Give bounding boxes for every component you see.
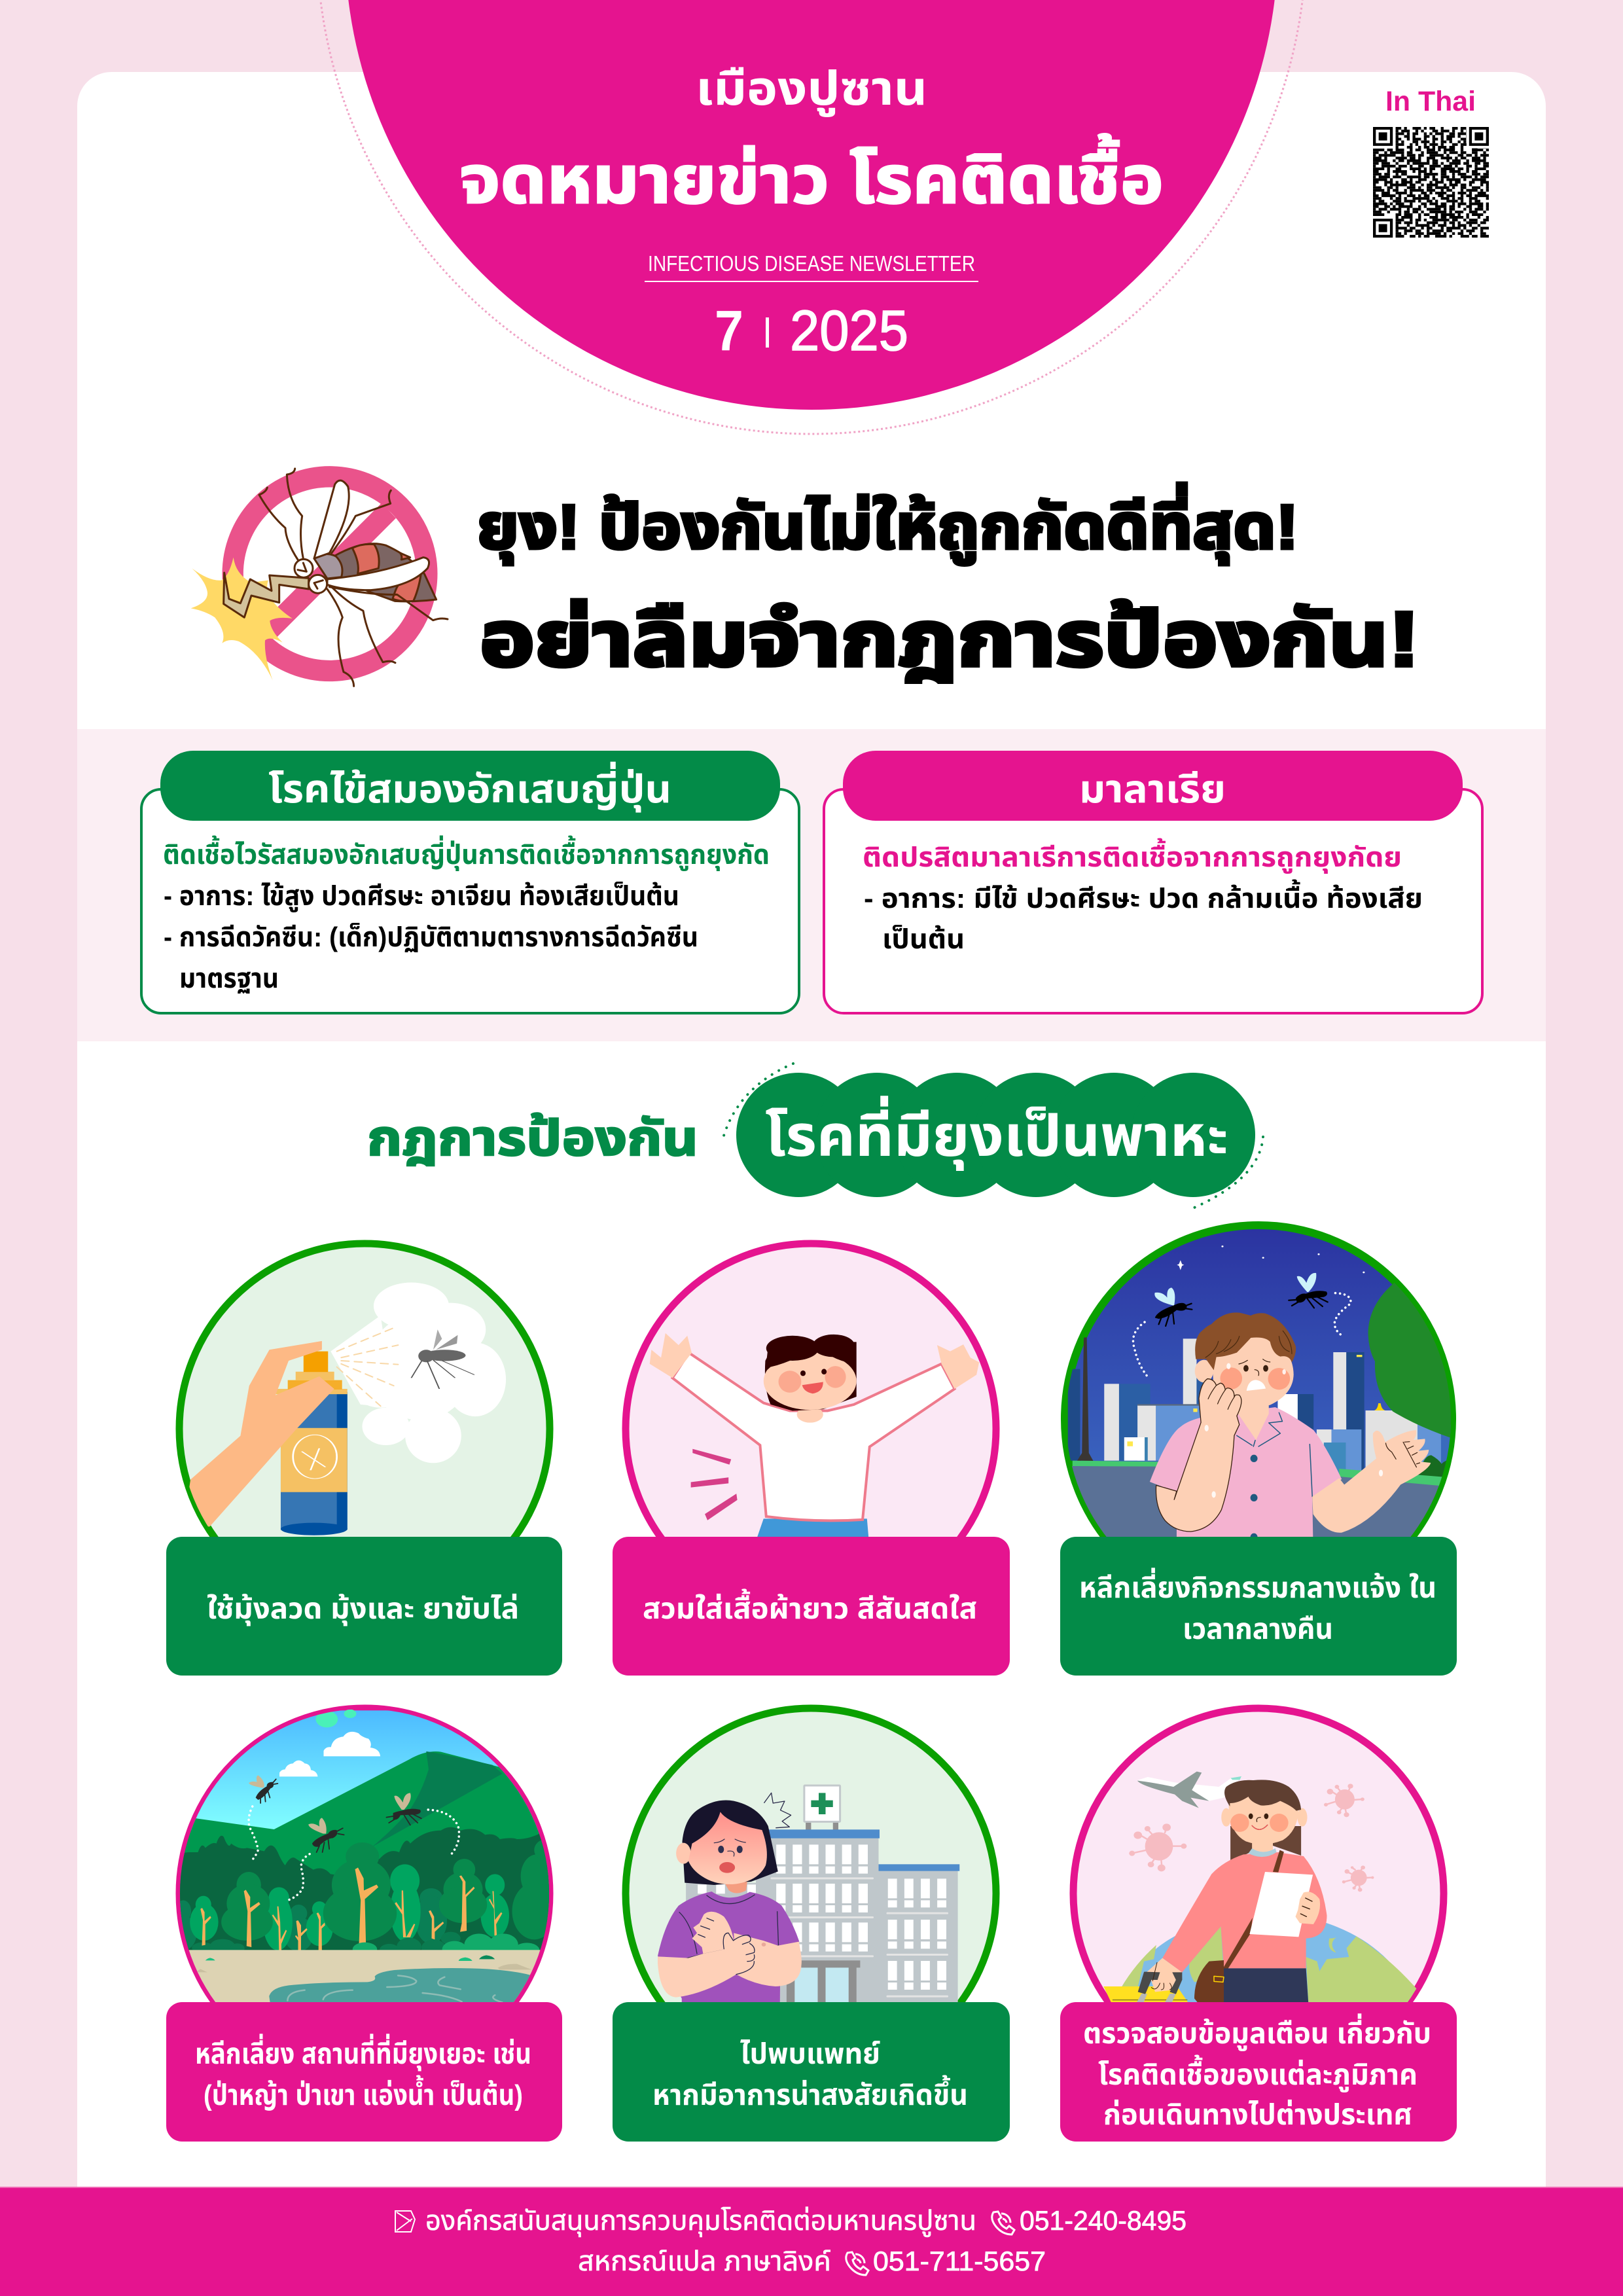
main headline line 1: ยุง! ป้องกันไม่ให้ถูกกัดดีที่สุด!	[477, 483, 1298, 565]
card label: สวมใส่เสื้อผ้ายาว สีสันสดใส	[643, 1588, 977, 1625]
main headline line 2: อย่าลืมจำกฎการป้องกัน!	[480, 596, 1419, 683]
issue date: 7	[715, 299, 743, 363]
card label	[166, 1537, 562, 1676]
footer organisation: องค์กรสนับสนุนการควบคุมโรคติดต่อมหานครปูซาน	[425, 2205, 976, 2237]
header badge	[317, 0, 1306, 434]
footer phone 1: 051-240-8495	[1020, 2205, 1186, 2236]
panel text: มาตรฐาน	[179, 963, 279, 994]
card label	[613, 2002, 1010, 2142]
panel: Japanese encephalitis	[141, 751, 799, 1013]
card label: เวลากลางคืน	[1183, 1613, 1333, 1645]
panel: rule 3 night activities	[1060, 1225, 1462, 1676]
mosquito silhouettes	[1154, 1273, 1328, 1326]
issue date	[715, 299, 908, 363]
illustration: forest and pond	[169, 1710, 559, 2005]
icon: no-mosquito sign	[191, 469, 448, 686]
disease information band	[77, 729, 1546, 1041]
header title: จดหมายข่าว โรคติดเชื้อ	[459, 134, 1164, 217]
panel: rule 1 repellent	[166, 1244, 562, 1676]
footer translation service: สหกรณ์แปล ภาษาลิงค์	[578, 2246, 831, 2276]
card label: หลีกเลี่ยง สถานที่ที่มียุงเยอะ เช่น	[195, 2034, 531, 2072]
card label	[613, 1537, 1010, 1676]
panel text	[863, 838, 1423, 954]
scalloped heading badge: โรคที่มียุงเป็นพาหะ	[765, 1096, 1228, 1171]
card label	[1060, 2002, 1457, 2142]
panel: rule 4 avoid breeding areas	[166, 1708, 562, 2142]
section heading	[367, 1064, 1263, 1208]
icon: phone 1	[992, 2212, 1014, 2234]
language label: In Thai	[1385, 86, 1476, 117]
panel: rule 2 long clothing	[613, 1244, 1010, 1676]
card label: หลีกเลี่ยงกิจกรรมกลางแจ้ง ใน	[1079, 1568, 1436, 1604]
panel heading	[160, 751, 780, 821]
panel heading: มาลาเรีย	[1079, 767, 1226, 811]
icon: document	[395, 2211, 415, 2232]
issue date: 2025	[790, 299, 908, 363]
illustration: sick woman and hospital	[658, 1785, 959, 2005]
newsletter subtitle: INFECTIOUS DISEASE NEWSLETTER	[648, 251, 975, 276]
panel: rule 6 check travel alerts	[1060, 1708, 1457, 2145]
card label: ก่อนเดินทางไปต่างประเทศ	[1103, 2099, 1412, 2131]
mosquito silhouettes	[249, 1775, 421, 1852]
card label: ใช้มุ้งลวด มุ้งและ ยาขับไล่	[207, 1593, 519, 1626]
illustration: woman in long sleeves	[650, 1333, 979, 1539]
card label: ไปพบแพทย์	[740, 2038, 880, 2070]
footer phone 2: 051-711-5657	[873, 2246, 1046, 2276]
card label	[166, 2002, 562, 2142]
card label: ตรวจสอบข้อมูลเตือน เกี่ยวกับ	[1083, 2013, 1431, 2051]
section heading: กฎการป้องกัน	[367, 1111, 698, 1166]
card label	[1060, 1537, 1457, 1676]
panel text: - อาการ: มีไข้ ปวดศีรษะ ปวด กล้ามเนื้อ ท้องเสีย	[864, 879, 1423, 914]
panel heading	[843, 751, 1463, 821]
panel text: - การฉีดวัคซีน: (เด็ก)ปฏิบัติตามตารางการฉีดวัคซีน	[164, 922, 698, 952]
panel text: ติดปรสิตมาลาเรีการติดเชื้อจากการถูกยุงกัดย	[863, 838, 1402, 874]
panel: malaria	[824, 751, 1482, 1013]
header city name: เมืองปูซาน	[696, 63, 927, 117]
card label: (ป่าหญ้า ป่าเขา แอ่งน้ำ เป็นต้น)	[204, 2075, 523, 2111]
card label: โรคติดเชื้อของแต่ละภูมิภาค	[1098, 2054, 1418, 2092]
panel heading: โรคไข้สมองอักเสบญี่ปุ่น	[268, 761, 671, 813]
panel: rule 5 see a doctor	[613, 1708, 1010, 2142]
panel text: เป็นต้น	[882, 924, 965, 954]
panel text: ติดเชื้อไวรัสสมองอักเสบญี่ปุ่นการติดเชื้อจากการถูกยุงกัด	[163, 835, 770, 871]
panel text: - อาการ: ไข้สูง ปวดศีรษะ อาเจียน ท้องเสียเป็นต้น	[164, 880, 679, 912]
icon: phone 2	[846, 2252, 868, 2275]
footer	[0, 2187, 1623, 2296]
illustration: traveller and globe	[1103, 1771, 1416, 2002]
panel text	[163, 835, 770, 994]
card label: หากมีอาการน่าสงสัยเกิดขึ้น	[652, 2075, 968, 2111]
illustration: man at night city	[1068, 1246, 1462, 1541]
QR code	[1373, 127, 1489, 238]
illustration: spray can and hand	[183, 1283, 506, 1535]
scalloped heading badge	[736, 1073, 1255, 1197]
